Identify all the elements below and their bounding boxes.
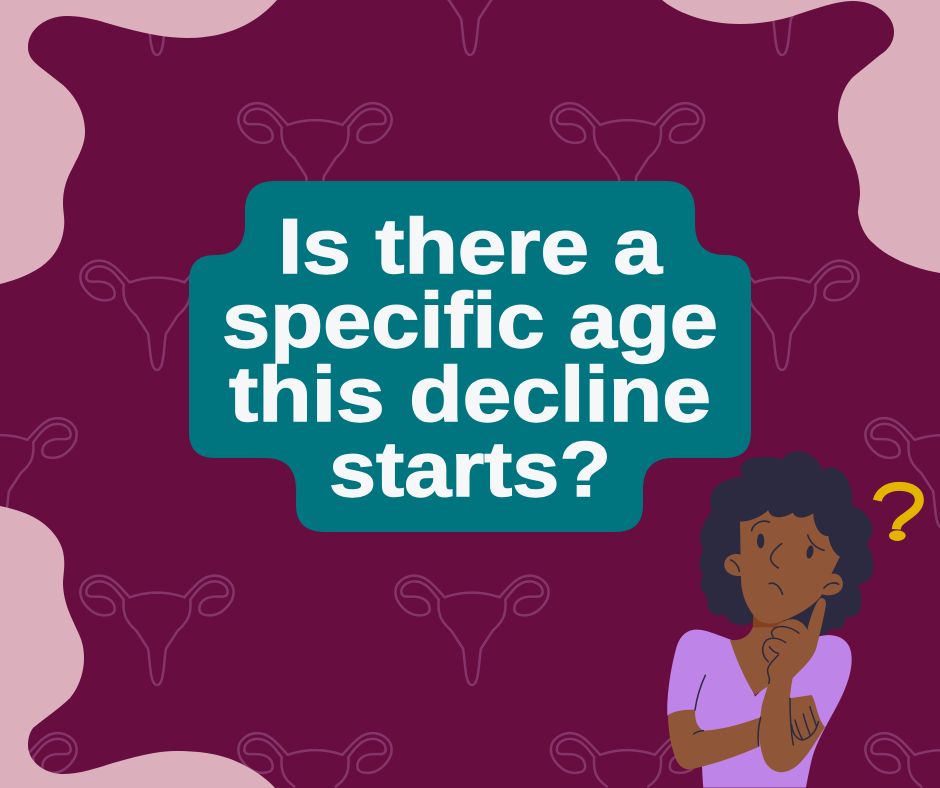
icon: thinking woman	[667, 451, 919, 788]
ears	[724, 554, 742, 576]
blob: top right	[662, 0, 940, 273]
title: this decline	[229, 350, 711, 438]
eyes	[757, 534, 764, 548]
hair	[700, 451, 873, 637]
blob: bottom left	[0, 506, 275, 788]
raised hand and forearm	[759, 598, 826, 772]
icon: question mark	[877, 486, 919, 541]
blob: top left	[0, 0, 277, 284]
face	[740, 510, 840, 624]
title	[222, 202, 718, 513]
chest	[730, 627, 773, 695]
facial features	[731, 521, 839, 594]
teal title panel	[189, 181, 751, 532]
linework	[694, 627, 818, 746]
title: specific age	[222, 276, 718, 364]
fist and lower arm	[668, 710, 761, 769]
title: starts?	[329, 425, 611, 513]
title: Is there a	[278, 202, 663, 290]
shirt	[667, 630, 852, 788]
neck shadow	[753, 615, 785, 632]
